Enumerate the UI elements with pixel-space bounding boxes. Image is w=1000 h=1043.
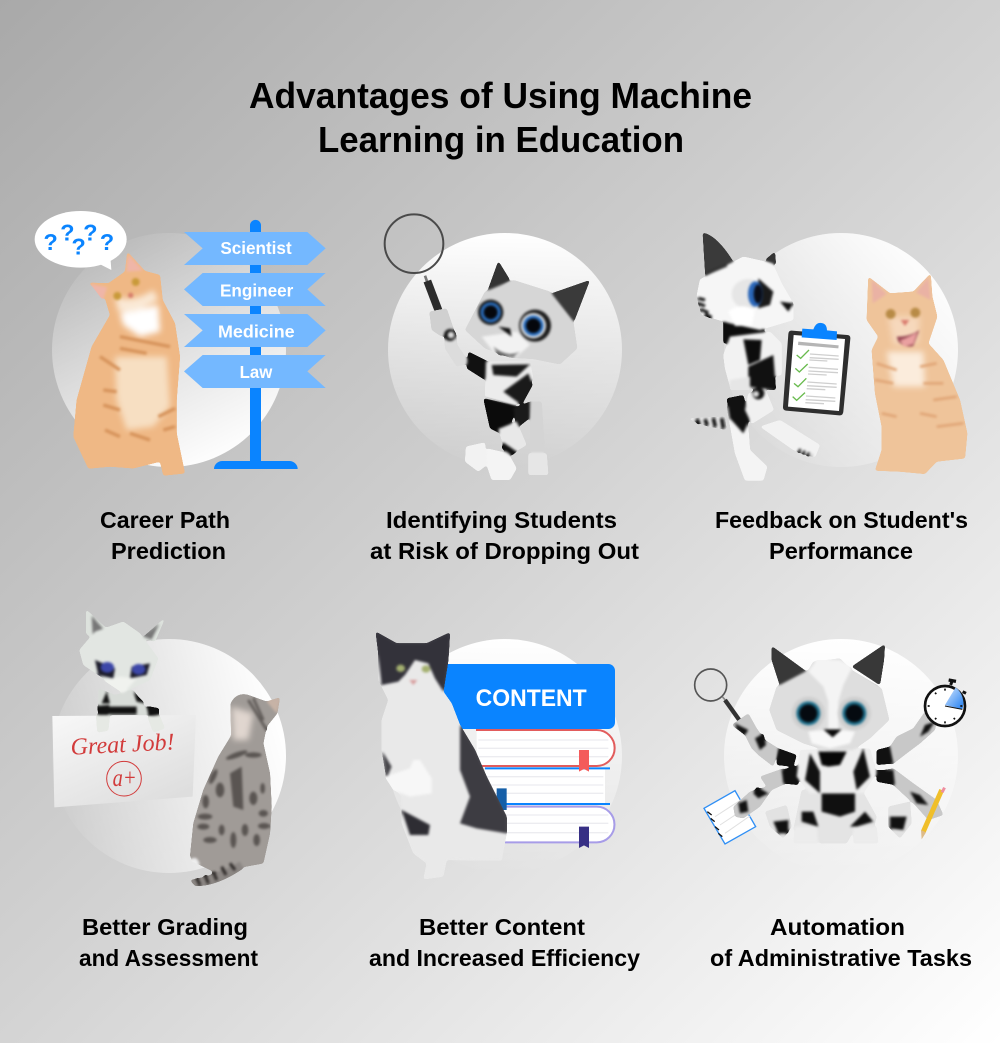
speech bubble with question marks: ? [44,229,58,255]
magnifier [385,214,444,325]
illustration: robot cat with magnifier [385,214,590,480]
clipboard with checklist [783,323,850,415]
title: Advantages of Using Machine [249,75,752,116]
caption: better content [369,914,640,971]
title: Learning in Education [318,119,684,160]
content banner: CONTENT [476,685,587,712]
caption: better content: and Increased Efficiency [369,945,640,971]
magnifier [695,669,742,723]
backdrop circle [388,639,622,873]
signpost: Engineer [220,281,293,301]
caption: identifying students: at Risk of Dropping Out [370,538,639,564]
content banner [443,664,615,729]
panel: feedback on student's performance [687,233,967,481]
panel: automation of administrative tasks [695,639,966,873]
caption: career path prediction: Career Path [100,507,230,533]
caption: better grading: Better Grading [82,914,248,940]
signpost: Medicine [218,322,295,342]
panel: career path prediction [35,211,326,476]
caption: feedback: Performance [769,538,913,564]
notepad [704,791,756,844]
note sheet: Great Job! [70,729,175,761]
caption: career path prediction [100,507,230,564]
speech bubble with question marks: ? [60,220,74,246]
speech bubble with question marks: ? [100,229,114,255]
caption: identifying students [370,507,639,564]
speech bubble with question marks: ? [72,233,86,259]
robot [429,261,590,480]
panel: better grading and assessment [52,609,286,886]
panel: identifying students at risk [385,214,622,480]
caption: feedback: Feedback on Student's [715,507,968,533]
speech bubble with question marks [35,211,127,270]
ginger kitten [867,273,967,474]
signpost: Scientist [220,238,292,258]
stopwatch [925,679,966,726]
caption: career path prediction: Prediction [111,538,226,564]
illustration: orange cat and signpost [35,211,326,476]
signpost [184,220,326,469]
book stack [476,730,615,848]
signpost: Law [240,362,273,382]
caption: better grading [79,914,258,971]
caption: better grading: and Assessment [79,945,258,971]
backdrop circle [724,233,958,467]
title [249,75,752,160]
pencil [921,789,945,839]
robot [732,644,943,843]
panel: better content and efficiency [376,632,622,879]
backdrop circle [52,639,286,873]
black and white cat [376,632,507,879]
illustration: robot with note and tabby cat [52,609,280,886]
speech bubble with question marks: ? [83,220,97,246]
caption: automation [710,914,972,971]
note sheet [52,715,196,807]
caption: automation: of Administrative Tasks [710,945,972,971]
backdrop circle [52,233,286,467]
illustration: robot with clipboard and kitten [687,233,967,481]
orange cat [73,252,185,476]
robot [79,609,165,733]
illustration: multi-armed robot cat [695,644,966,844]
backdrop circle [388,233,622,467]
caption: feedback [715,507,968,564]
illustration: books, content sign and cat [376,632,615,879]
note sheet: a+ [113,764,137,792]
caption: better content: Better Content [419,914,585,940]
caption: identifying students: Identifying Students [386,507,617,533]
backdrop circle [724,639,958,873]
caption: automation: Automation [770,914,905,940]
robot [687,233,820,481]
tabby cat [190,694,280,886]
